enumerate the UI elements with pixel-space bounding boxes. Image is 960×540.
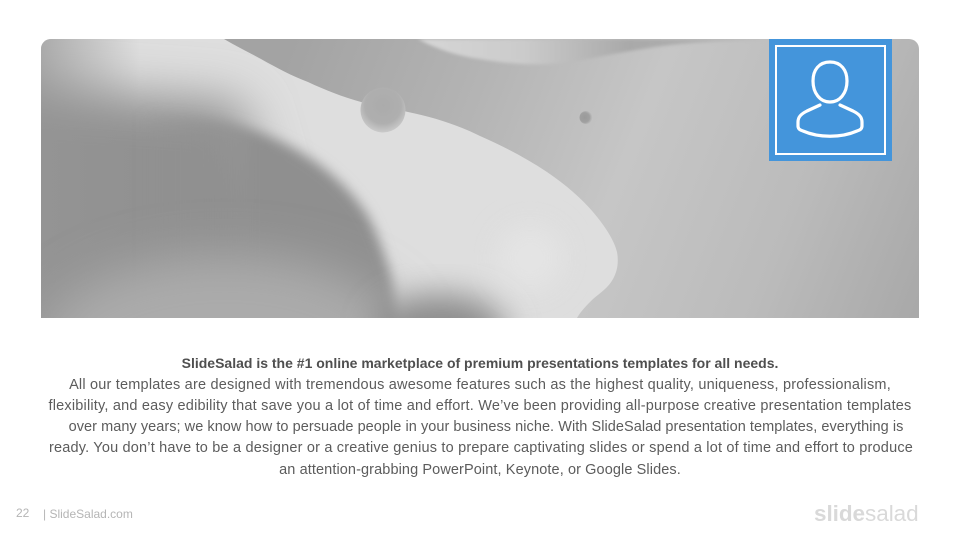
headline sentence: SlideSalad is the #1 online marketplace of premium presentations templates for all needs. — [182, 354, 778, 370]
body text block — [48, 354, 913, 478]
body text block: an attention-grabbing PowerPoint, Keynote, or Google Slides. — [279, 462, 681, 478]
logo: slidesalad wordmark: slidesalad — [814, 501, 919, 526]
icon: user profile badge — [769, 39, 892, 161]
body text block: flexibility, and easy edibility that save you a lot of time and effort. We’ve been providing all-purpose creative presentation templates — [48, 398, 912, 414]
page number: 22 — [16, 506, 29, 520]
hero image: abstract grey 3D shapes — [41, 39, 919, 318]
body text block: over many years; we know how to persuade people in your business niche. With SlideSalad presentation templates, everything is — [69, 419, 903, 435]
footer site name: | SlideSalad.com — [43, 507, 133, 521]
body text block: All our templates are designed with tremendous awesome features such as the highest quality, uniqueness, professionalism, — [69, 377, 891, 393]
body text block: ready. You don’t have to be a designer or a creative genius to prepare captivating slides or spend a lot of time and effort to produce — [49, 440, 913, 456]
